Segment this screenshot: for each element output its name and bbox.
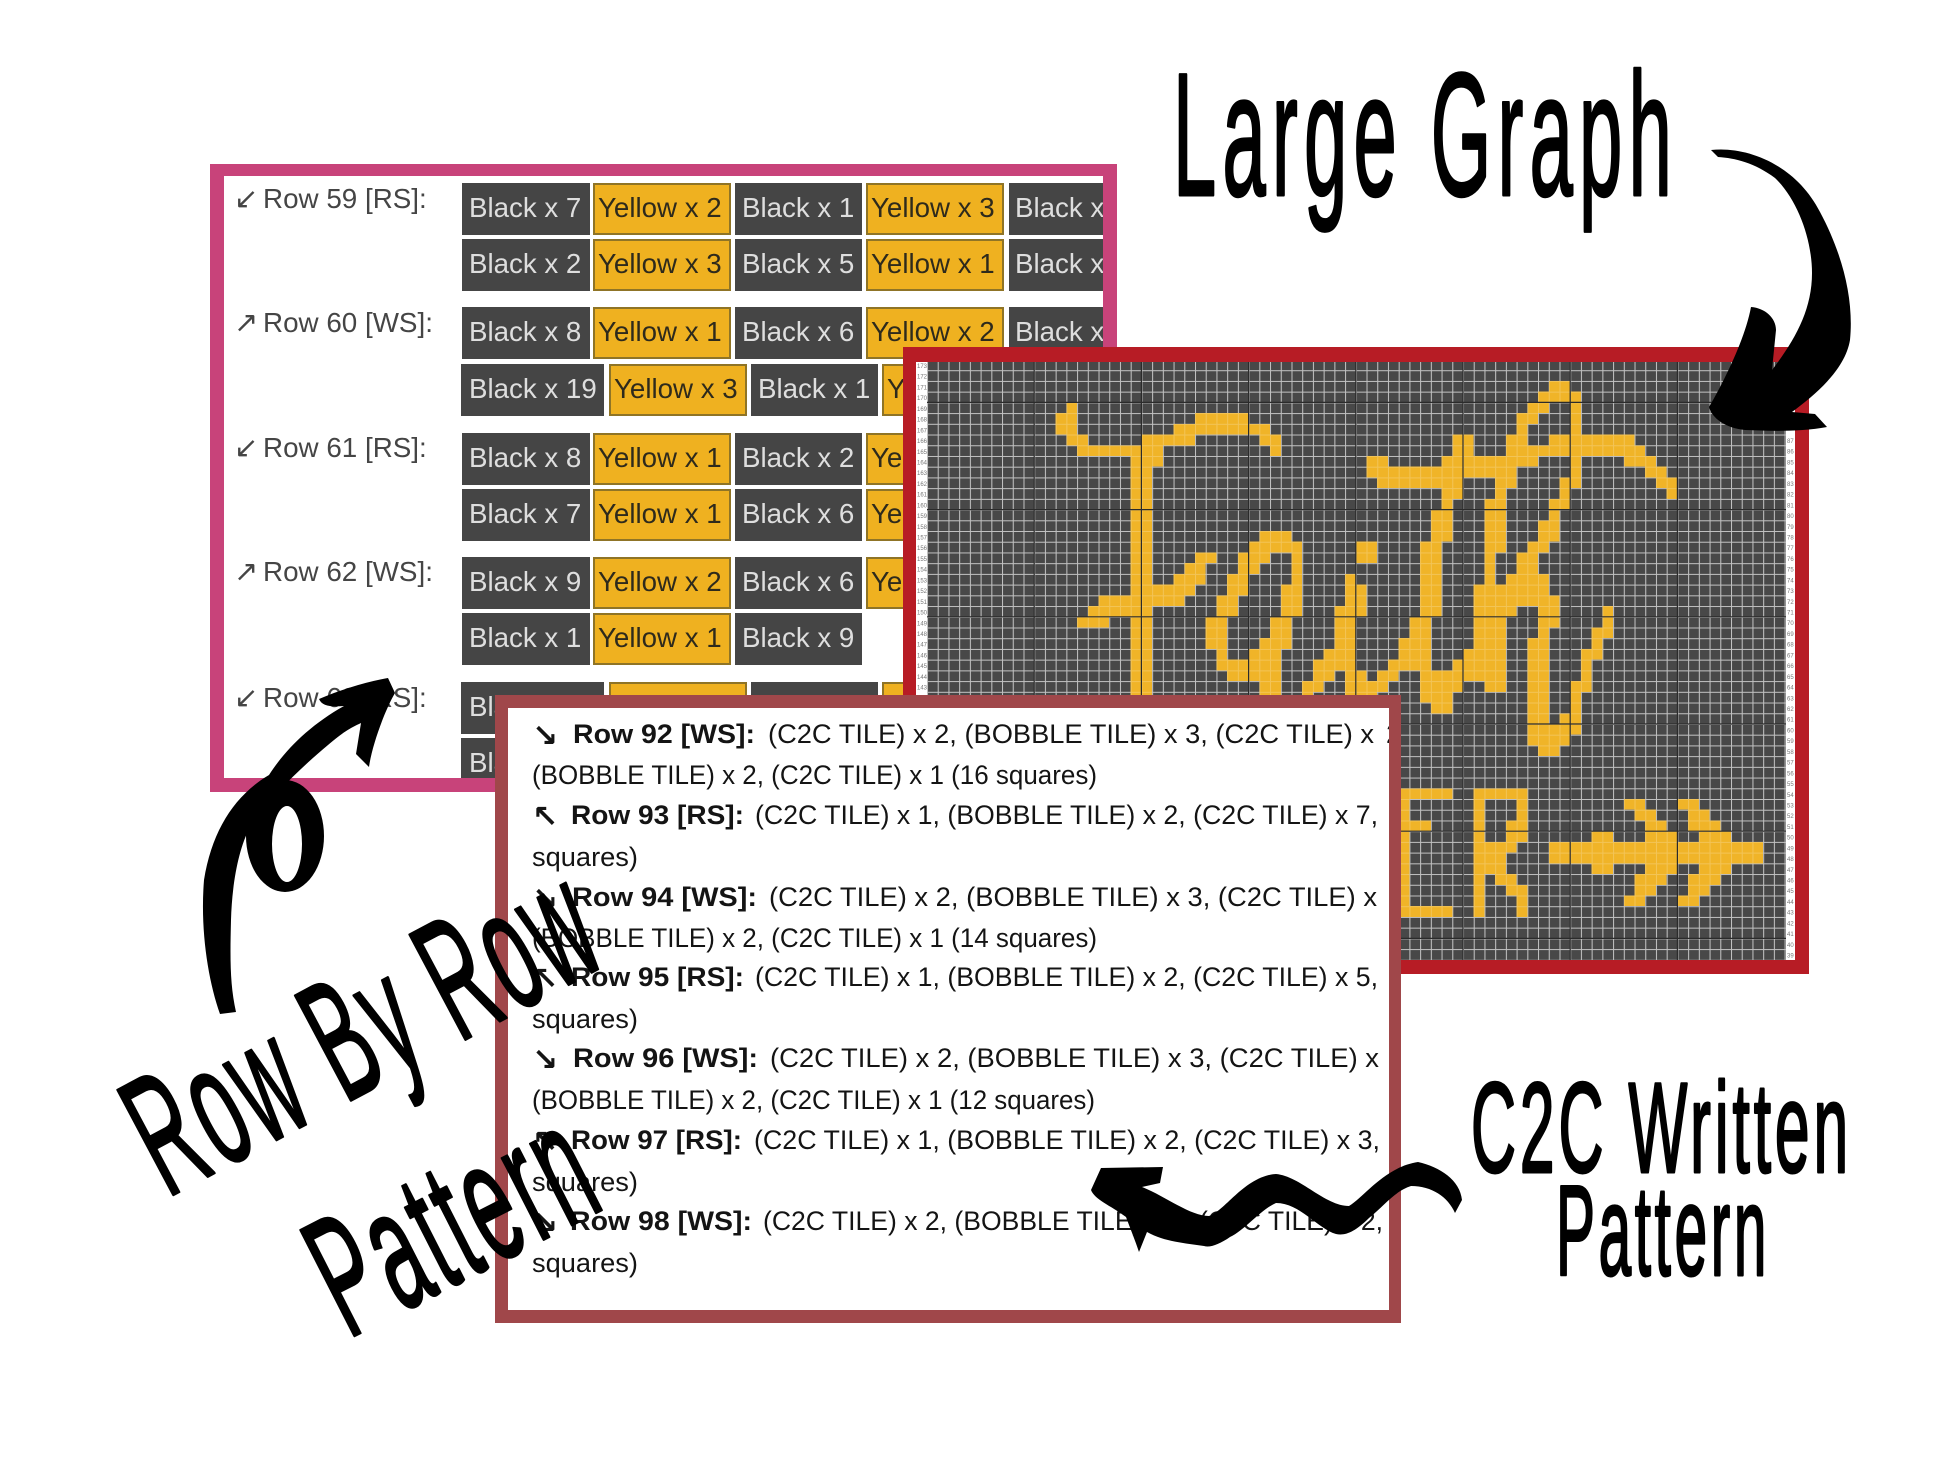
right row number strip: 58 <box>1787 750 1794 756</box>
row 60 instructions: Yellow x 1 <box>598 316 722 347</box>
left row number strip: 162 <box>917 482 928 488</box>
left row number strip: 154 <box>917 568 928 574</box>
row 62 instructions: Black x 6 <box>742 566 854 597</box>
row 61 instructions: Row 61 [RS]: <box>263 432 427 463</box>
right row number strip: 53 <box>1787 803 1794 809</box>
row 59 instructions: Black x 1 <box>742 192 854 223</box>
row 61 instructions: ↙ <box>234 430 258 464</box>
right row number strip: 80 <box>1787 514 1794 520</box>
right row number strip: 82 <box>1787 493 1794 499</box>
row 98 text <box>532 1205 1383 1278</box>
right row number strip: 78 <box>1787 535 1794 541</box>
right row number strip: 81 <box>1787 503 1794 509</box>
left row number strip: 157 <box>917 536 928 542</box>
row 61 instructions: Yellow x 1 <box>598 442 722 473</box>
row 92 text <box>534 724 1389 790</box>
row 96 text: ↘ <box>532 1042 558 1078</box>
arrow: wavy arrow to written pattern <box>1091 1162 1462 1252</box>
row 98 text: (C2C TILE) x 2, (BOBBLE TILE) x 2, (C2C TILE) x 2, <box>763 1206 1383 1236</box>
right row number strip: 63 <box>1787 696 1794 702</box>
left row number strip: 149 <box>917 621 928 627</box>
right row number strip: 40 <box>1787 943 1794 949</box>
row 93 text: ↖ <box>532 799 558 835</box>
right row number strip: 75 <box>1787 568 1794 574</box>
right row number strip: 39 <box>1787 954 1794 960</box>
row 61 instructions: Yellow x 1 <box>871 498 995 529</box>
row 93 text <box>532 799 1378 872</box>
right row number strip: 74 <box>1787 578 1794 584</box>
right row number strip: 67 <box>1787 653 1794 659</box>
heading: Row By Row Pattern: Row By Row <box>94 824 630 1231</box>
right row number strip: 51 <box>1787 825 1794 831</box>
right row number strip: 84 <box>1787 471 1794 477</box>
left row number strip: 171 <box>917 385 928 391</box>
row 59 instructions: Row 59 [RS]: <box>263 183 427 214</box>
right row number strip: 54 <box>1787 793 1794 799</box>
row 61 instructions: Black x 7 <box>469 498 581 529</box>
row 62 instructions: Yellow x 1 <box>598 622 722 653</box>
row 61 instructions: Yellow x 1 <box>871 442 995 473</box>
left row number strip: 151 <box>917 600 928 606</box>
left row number strip: 160 <box>917 503 928 509</box>
right row number strip: 61 <box>1787 718 1794 724</box>
row 60 instructions: Black x 6 <box>742 316 854 347</box>
row 59 instructions: Black x 2 <box>469 248 581 279</box>
panel: C2C written pattern <box>495 695 1409 1323</box>
row 62 instructions: Black x 9 <box>742 622 854 653</box>
right row number strip: 65 <box>1787 675 1794 681</box>
heading: Row By Row Pattern: Pattern <box>278 1067 628 1372</box>
left row number strip: 143 <box>917 686 928 692</box>
row 60 instructions: Black x 19 <box>469 373 597 404</box>
left row number strip: 156 <box>917 546 928 552</box>
left row number strip: 166 <box>917 439 928 445</box>
row 95 text <box>532 961 1378 1034</box>
row 61 instructions <box>238 433 903 541</box>
row 98 text: ↘ <box>532 1205 558 1241</box>
arrow: row by row label to panel <box>203 678 395 1014</box>
right row number strip: 62 <box>1787 707 1794 713</box>
panel: large graph <box>903 347 1809 974</box>
row 95 text: squares) <box>532 1004 638 1034</box>
chart: pixel grid with yellow design <box>927 360 1786 960</box>
row 93 text: (C2C TILE) x 1, (BOBBLE TILE) x 2, (C2C TILE) x 7, <box>755 800 1378 830</box>
row 59 instructions: Yellow x 3 <box>871 192 995 223</box>
right row number strip: 72 <box>1787 600 1794 606</box>
row 63 instructions <box>238 682 903 778</box>
row 96 text: (BOBBLE TILE) x 2, (C2C TILE) x 1 (12 squares) <box>532 1085 1095 1115</box>
left row number strip: 158 <box>917 525 928 531</box>
left row number strip: 170 <box>917 396 928 402</box>
left row number strip: 172 <box>917 375 928 381</box>
row 96 text: Row 96 [WS]: <box>573 1043 758 1073</box>
row 59 instructions: Yellow x 1 <box>871 248 995 279</box>
row 94 text: Row 94 [WS]: <box>572 882 757 912</box>
row 94 text: ↘ <box>532 881 558 917</box>
row 60 instructions: Black x 1 <box>758 373 870 404</box>
left row number strip: 169 <box>917 407 928 413</box>
left row number strip: 164 <box>917 460 928 466</box>
row 62 instructions: Yellow x 1 <box>871 566 995 597</box>
row 62 instructions: ↗ <box>234 554 258 588</box>
row 61 instructions: Black x 2 <box>742 442 854 473</box>
row 96 text <box>532 1042 1380 1115</box>
row 97 text: (C2C TILE) x 1, (BOBBLE TILE) x 2, (C2C TILE) x 3, <box>754 1125 1380 1155</box>
row 61 instructions: Black x 8 <box>469 442 581 473</box>
right row number strip: 83 <box>1787 482 1794 488</box>
right row number strip: 41 <box>1787 932 1794 938</box>
row 63 instructions: Yellow x 1 <box>614 691 738 722</box>
row 60 instructions: Yellow x 1 <box>887 373 1011 404</box>
left row number strip: 150 <box>917 611 928 617</box>
row 59 instructions: Black x 4 <box>1015 192 1127 223</box>
left row number strip: 147 <box>917 643 928 649</box>
row 92 text: ↘ <box>532 718 558 754</box>
right row number strip: 68 <box>1787 643 1794 649</box>
row 92 text: 2, <box>1386 719 1409 749</box>
right row number strip: 70 <box>1787 621 1794 627</box>
left row number strip: 167 <box>917 428 928 434</box>
row 59 instructions: Black x 3 <box>1015 248 1127 279</box>
row 93 text: Row 93 [RS]: <box>571 800 744 830</box>
row 95 text: Row 95 [RS]: <box>571 962 744 992</box>
right row number strip: 48 <box>1787 857 1794 863</box>
row 63 instructions: Black x 1 <box>758 691 870 722</box>
right row number strip: 77 <box>1787 546 1794 552</box>
row 97 text: squares) <box>532 1167 638 1197</box>
row 97 text <box>532 1124 1380 1197</box>
right row number strip: 86 <box>1787 450 1794 456</box>
row 92 text: Row 92 [WS]: <box>573 719 755 749</box>
row 59 instructions: Yellow x 2 <box>598 192 722 223</box>
left row number strip: 161 <box>917 493 928 499</box>
right row number strip: 73 <box>1787 589 1794 595</box>
right row number strip: 42 <box>1787 921 1794 927</box>
right row number strip: 46 <box>1787 879 1794 885</box>
row 60 instructions: Row 60 [WS]: <box>263 307 433 338</box>
right row number strip: 43 <box>1787 911 1794 917</box>
row 62 instructions: Black x 1 <box>469 622 581 653</box>
left row number strip: 153 <box>917 578 928 584</box>
row 92 text: (C2C TILE) x 2, (BOBBLE TILE) x 3, (C2C TILE) x <box>768 719 1375 749</box>
row 60 instructions: ↗ <box>234 305 258 339</box>
row 63 instructions: Black x 12 <box>469 747 597 778</box>
arrow: large graph label to graph <box>1709 149 1851 431</box>
row 97 text: Row 97 [RS]: <box>571 1125 742 1155</box>
left row number strip: 146 <box>917 653 928 659</box>
row 92 text: (BOBBLE TILE) x 2, (C2C TILE) x 1 (16 squares) <box>532 760 1097 790</box>
row 62 instructions <box>238 557 903 665</box>
row 94 text: (BOBBLE TILE) x 2, (C2C TILE) x 1 (14 squares) <box>532 923 1097 953</box>
right row number strip: 71 <box>1787 611 1794 617</box>
left row number strip: 168 <box>917 418 928 424</box>
row 60 instructions: Yellow x 3 <box>614 373 738 404</box>
row 62 instructions: Black x 9 <box>469 566 581 597</box>
right row number strip: 60 <box>1787 728 1794 734</box>
right row number strip: 64 <box>1787 686 1794 692</box>
right row number strip: 79 <box>1787 525 1794 531</box>
row 95 text: ↖ <box>532 961 558 997</box>
row 94 text: (C2C TILE) x 2, (BOBBLE TILE) x 3, (C2C TILE) x <box>769 882 1378 912</box>
right row number strip: 44 <box>1787 900 1794 906</box>
right row number strip: 85 <box>1787 460 1794 466</box>
row 63 instructions: Row 63 [RS]: <box>263 682 427 713</box>
left row number strip: 152 <box>917 589 928 595</box>
heading: C2C Written Pattern <box>1471 1057 1852 1303</box>
left row number strip: 173 <box>917 364 928 370</box>
left row number strip: 144 <box>917 675 928 681</box>
row 98 text: squares) <box>532 1248 638 1278</box>
right row number strip: 56 <box>1787 771 1794 777</box>
row 59 instructions: Black x 5 <box>742 248 854 279</box>
row 60 instructions <box>234 305 1127 416</box>
right row number strip: 47 <box>1787 868 1794 874</box>
left row number strip: 163 <box>917 471 928 477</box>
right row number strip: 59 <box>1787 739 1794 745</box>
row 98 text: Row 98 [WS]: <box>570 1206 752 1236</box>
row 59 instructions: Yellow x 3 <box>598 248 722 279</box>
left row number strip: 155 <box>917 557 928 563</box>
right row number strip: 76 <box>1787 557 1794 563</box>
row 63 instructions: Black x 10 <box>469 691 597 722</box>
row 60 instructions: Black x 2 <box>1015 316 1127 347</box>
row 96 text: (C2C TILE) x 2, (BOBBLE TILE) x 3, (C2C TILE) x <box>770 1043 1380 1073</box>
right row number strip: 57 <box>1787 761 1794 767</box>
right row number strip: 87 <box>1787 439 1794 445</box>
row 62 instructions: Yellow x 2 <box>598 566 722 597</box>
left row number strip: 148 <box>917 632 928 638</box>
row 97 text: ↖ <box>532 1124 558 1160</box>
right row number strip: 45 <box>1787 889 1794 895</box>
left row number strip: 159 <box>917 514 928 520</box>
row 93 text: squares) <box>532 842 638 872</box>
heading: Row By Row Pattern <box>94 824 630 1372</box>
right row number strip: 50 <box>1787 836 1794 842</box>
row 59 instructions <box>234 181 1127 291</box>
right row number strip: 69 <box>1787 632 1794 638</box>
row 60 instructions: Black x 8 <box>469 316 581 347</box>
row 62 instructions: Row 62 [WS]: <box>263 556 433 587</box>
left row number strip: 165 <box>917 450 928 456</box>
panel: row by row pattern <box>210 164 1127 792</box>
row 95 text: (C2C TILE) x 1, (BOBBLE TILE) x 2, (C2C TILE) x 5, <box>755 962 1378 992</box>
row 61 instructions: Black x 6 <box>742 498 854 529</box>
row 61 instructions: Yellow x 1 <box>598 498 722 529</box>
row 59 instructions: ↙ <box>234 181 258 215</box>
row 60 instructions: Yellow x 2 <box>871 316 995 347</box>
row 94 text <box>532 881 1378 953</box>
row 59 instructions: Black x 7 <box>469 192 581 223</box>
row 63 instructions: ↙ <box>234 680 258 714</box>
row 63 instructions: Yellow x 1 <box>887 691 1011 722</box>
right row number strip: 49 <box>1787 846 1794 852</box>
right row number strip: 55 <box>1787 782 1794 788</box>
left row number strip: 145 <box>917 664 928 670</box>
right row number strip: 66 <box>1787 664 1794 670</box>
right row number strip: 52 <box>1787 814 1794 820</box>
